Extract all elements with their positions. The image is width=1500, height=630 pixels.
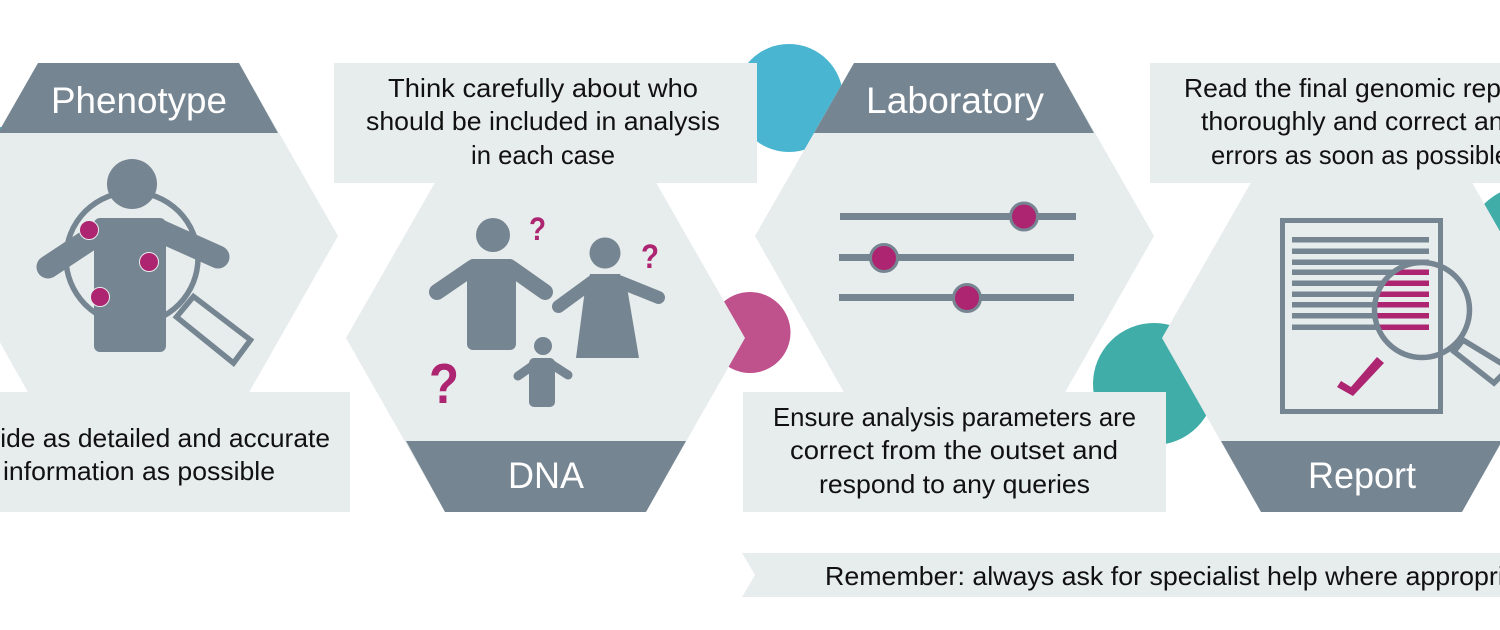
ribbon: reminder <box>742 553 1500 597</box>
report footer band <box>1221 441 1500 512</box>
icon: family with question marks: ? <box>429 352 459 416</box>
heading: Laboratory: Laboratory <box>866 80 1045 121</box>
icon: family with question marks: ? <box>641 238 659 276</box>
icon: family with question marks <box>429 211 659 416</box>
text box: laboratory advice: Ensure analysis parameters are <box>773 402 1136 432</box>
blue sliver at left edge <box>0 127 4 134</box>
report hexagon <box>1162 165 1500 512</box>
laboratory hexagon <box>755 63 1154 410</box>
text box: DNA advice: in each case <box>471 140 615 170</box>
icon: person under magnifying glass <box>48 159 250 363</box>
heading: DNA: DNA <box>508 455 584 496</box>
text box: phenotype advice: information as possible <box>3 456 275 486</box>
panel: phenotype <box>0 63 338 410</box>
text box: laboratory advice: respond to any queries <box>819 469 1090 499</box>
text box: report advice <box>1150 63 1500 183</box>
text box: DNA advice: Think carefully about who <box>388 73 698 103</box>
phenotype header band <box>0 63 278 133</box>
laboratory header band <box>814 63 1094 133</box>
magenta circle <box>710 292 790 373</box>
blue circle <box>735 44 843 152</box>
text box: laboratory advice <box>743 392 1166 512</box>
ribbon: reminder: Remember: always ask for specialist help where appropriate <box>825 561 1500 591</box>
panel: DNA <box>346 165 745 512</box>
text box: phenotype advice <box>0 392 350 512</box>
text box: laboratory advice: correct from the outset and <box>790 435 1118 465</box>
DNA hexagon <box>346 165 745 512</box>
icon: family with question marks: ? <box>529 211 546 247</box>
heading: Phenotype: Phenotype <box>51 80 227 121</box>
teal circle lower <box>1093 323 1215 445</box>
panel: report <box>1162 165 1500 512</box>
teal circle upper <box>1465 185 1500 315</box>
phenotype hexagon <box>0 63 338 410</box>
heading: Report: Report <box>1308 455 1417 496</box>
text box: DNA advice: should be included in analysis <box>366 106 720 136</box>
icon: document with magnifier and tick <box>1282 220 1500 412</box>
icon: parameter sliders <box>839 203 1076 312</box>
text box: DNA advice <box>334 63 757 183</box>
panel: laboratory <box>755 63 1154 410</box>
DNA footer band <box>406 441 686 512</box>
text box: report advice: thoroughly and correct any <box>1201 106 1500 136</box>
